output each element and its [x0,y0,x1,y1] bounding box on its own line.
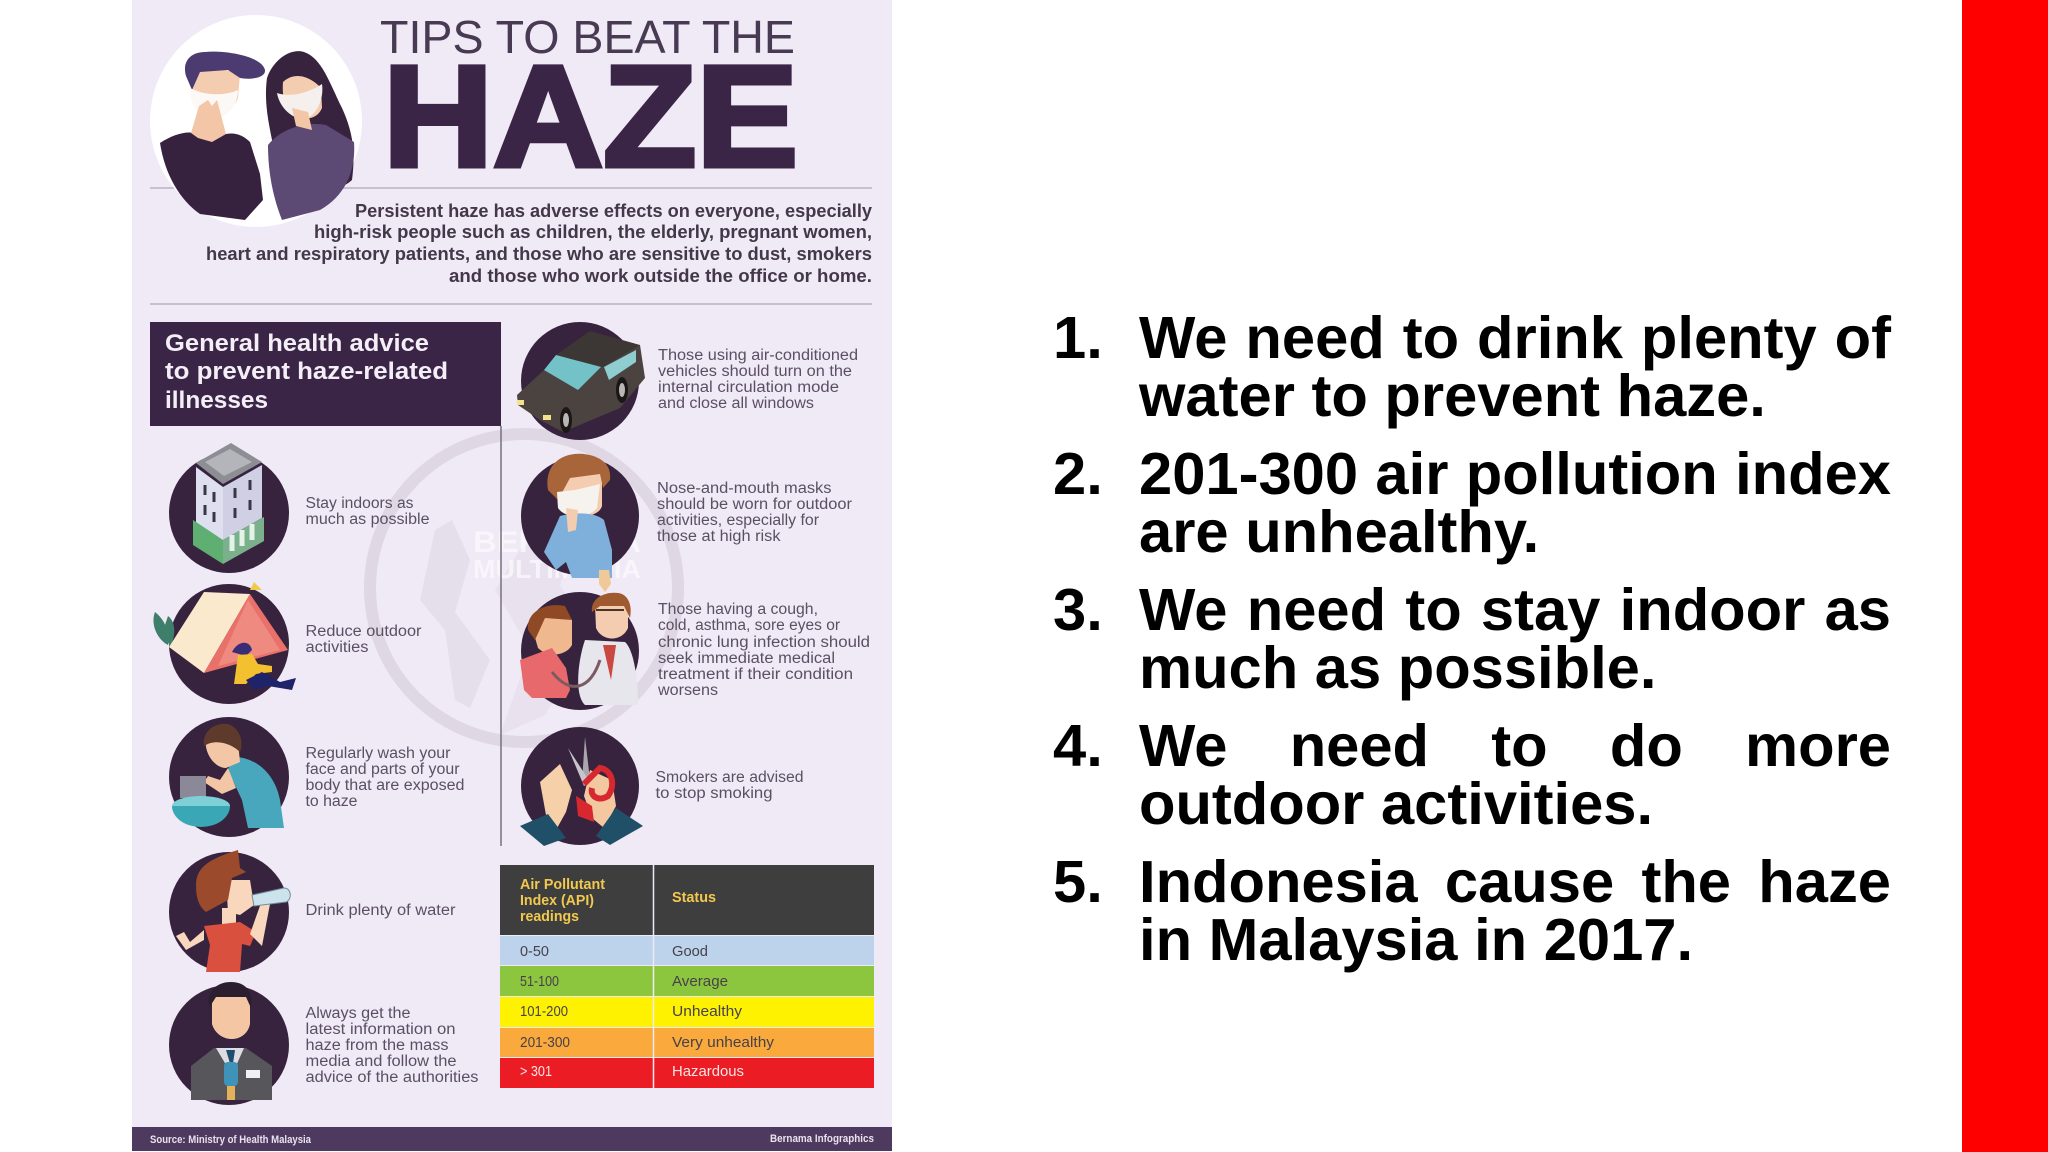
numbered list: item 2 [1053,440,1891,565]
text: masks: activities, especially for [657,512,819,529]
numbered list: item 1 [1053,304,1892,429]
text: stop smoking [656,769,804,802]
row: hazardous: Hazardous [672,1064,744,1080]
text: wash face: face and parts of your [306,761,460,778]
text: stop smoking: to stop smoking [656,785,772,802]
intro text: and those who work outside the office or home. [449,265,872,286]
row: average [500,966,874,996]
text: drink water: Drink plenty of water [306,902,456,919]
numbered list: item 4 [1053,712,1891,837]
icon: air-conditioned car [517,322,645,440]
numbered list: item 1: water to prevent haze. [1139,362,1766,429]
text: stay indoors [306,495,430,528]
icon: boy wearing mask [521,454,639,592]
text: latest information [306,1005,479,1086]
text: latest information: haze from the mass [306,1037,449,1054]
row: very unhealthy: Very unhealthy [672,1035,775,1051]
intro text: heart and respiratory patients, and those who are sensitive to dust, smokers [206,243,872,264]
title: HAZE [383,36,798,197]
text: air-conditioned vehicles: internal circulation mode [658,379,839,396]
footer bar: Source: Ministry of Health Malaysia [150,1134,312,1146]
text: masks: should be worn for outdoor [657,496,852,513]
row: average: 51-100 [520,974,559,990]
heading panel: general health advice: to prevent haze-related [165,358,448,385]
row: hazardous [500,1058,874,1088]
text: wash face: Regularly wash your [306,745,450,762]
icon: doctor and patient [520,592,639,710]
text: 2. [1053,440,1103,507]
watermark: Bernama Multimedia: MULTIMEDIA [473,554,641,584]
text: air-conditioned vehicles: Those using air-conditioned [658,347,858,364]
text: seek medical treatment: cold, asthma, sore eyes or [658,617,840,634]
text: latest information: Always get the [306,1005,410,1022]
row: average: Average [672,974,728,990]
text: stop smoking: Smokers are advised [656,769,804,786]
icon: scissors cutting cigarette [520,727,643,846]
row: unhealthy: Unhealthy [672,1004,743,1020]
icon: boy drinking water [169,850,290,972]
text: seek medical treatment: Those having a cough, [658,601,818,618]
heading panel: general health advice [150,322,501,426]
text: 1. [1053,304,1103,371]
numbered list: item 4: outdoor activities. [1139,770,1653,837]
intro text [206,200,873,286]
text: 5. [1053,848,1103,915]
text: air-conditioned vehicles: and close all windows [658,395,814,412]
text: masks [657,480,852,545]
numbered list: item 1: We need to drink plenty of [1139,304,1891,371]
icon: couple wearing masks [150,15,362,227]
row: good: 0-50 [520,944,549,960]
watermark: Bernama Multimedia [370,434,678,742]
icon: washing face [169,717,289,837]
numbered list: item 5 [1053,848,1891,973]
table header: Index (API) [520,892,594,909]
text: wash face: to haze [306,793,358,810]
numbered list: item 3 [1053,576,1891,701]
watermark: Bernama Multimedia: BERNAMA [473,526,641,559]
text: stay indoors: Stay indoors as [306,495,414,512]
table header: readings [520,908,579,925]
table header [500,865,874,935]
row: unhealthy: 101-200 [520,1004,568,1020]
text: latest information: advice of the authorities [306,1069,479,1086]
icon: tent with girl [153,582,296,704]
text: air-conditioned vehicles [658,347,858,412]
text: masks: Nose-and-mouth masks [657,480,832,497]
text: seek medical treatment: treatment if their condition [658,666,853,683]
row: unhealthy [500,997,874,1027]
text: masks: those at high risk [657,528,781,545]
footer bar [132,1127,892,1151]
icon: building [169,443,289,573]
row: hazardous: > 301 [520,1064,552,1080]
title: TIPS TO BEAT THE [380,11,795,63]
row: good [500,936,874,965]
text: reduce outdoor [306,623,422,656]
text: seek medical treatment: chronic lung infection should [658,634,870,651]
numbered list: item 3: We need to stay indoor as [1139,576,1891,643]
row: good: Good [672,944,708,960]
heading panel: general health advice: General health advice [165,330,429,357]
intro text: Persistent haze has adverse effects on everyone, especially [355,200,873,221]
icon: news reporter [169,982,289,1105]
numbered list: item 4: We need to do more [1139,712,1891,779]
column divider [500,426,502,846]
text: reduce outdoor: Reduce outdoor [306,623,422,640]
text: 4. [1053,712,1103,779]
text: seek medical treatment [657,601,870,699]
text: wash face [306,745,464,810]
numbered list: item 2: 201-300 air pollution index [1139,440,1891,507]
text: stay indoors: much as possible [306,511,430,528]
numbered list: item 3: much as possible. [1139,634,1656,701]
text: seek medical treatment: seek immediate medical [658,650,835,667]
table header: Status [672,889,716,906]
numbered list: item 5: in Malaysia in 2017. [1139,906,1693,973]
intro text: high-risk people such as children, the elderly, pregnant women, [314,221,872,242]
red side bar [1962,0,2048,1152]
footer bar: Bernama Infographics [770,1133,874,1145]
heading panel: general health advice: illnesses [165,387,268,414]
text: latest information: latest information on [306,1021,456,1038]
text: air-conditioned vehicles: vehicles should turn on the [658,363,852,380]
row: very unhealthy [500,1028,874,1057]
table: air pollutant index [500,865,874,1088]
numbered list: item 2: are unhealthy. [1139,498,1539,565]
text: reduce outdoor: activities [306,639,369,656]
text: wash face: body that are exposed [306,777,464,794]
text: latest information: media and follow the [306,1053,456,1070]
text: 3. [1053,576,1103,643]
row: very unhealthy: 201-300 [520,1035,570,1051]
text: seek medical treatment: worsens [657,682,718,699]
numbered list: item 5: Indonesia cause the haze [1139,848,1891,915]
table header: Air Pollutant [520,876,605,893]
rule lines [150,188,872,304]
